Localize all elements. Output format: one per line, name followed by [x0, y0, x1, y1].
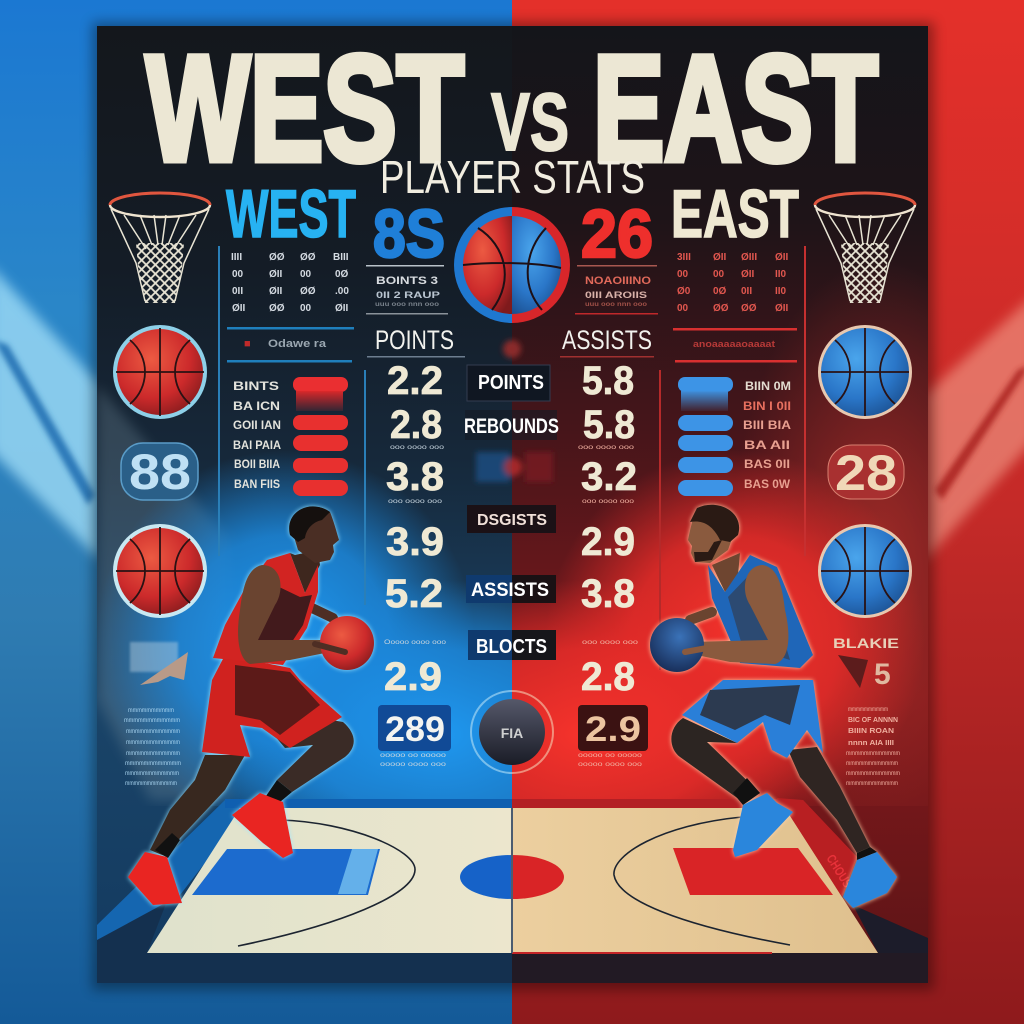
back shoe	[128, 852, 182, 905]
small stat table: east: 0II	[741, 286, 752, 297]
east small graphic	[833, 635, 899, 691]
icon: right hoop	[815, 193, 915, 303]
spotlight beams right	[925, 295, 1024, 560]
east bar list	[678, 377, 791, 496]
centre stat labels: ASSISTS	[471, 580, 549, 601]
east fine print: mmmmmmmmmmmm	[846, 781, 898, 787]
west bar list: BOII BIIA	[234, 457, 280, 471]
small stat table: east: ØIII	[741, 252, 757, 263]
icon: east ball lower	[818, 524, 912, 618]
west caption under score: BOINTS 3	[376, 275, 438, 287]
east team score: 26	[581, 196, 653, 272]
small stat table: west: ØII	[335, 303, 349, 314]
panel shadow	[92, 22, 934, 990]
east caption under score: 0III AROIIS	[585, 290, 647, 300]
west bar list: GOII IAN	[233, 418, 281, 432]
small stat table: east: 0Ø	[713, 286, 727, 297]
ball	[320, 616, 374, 670]
number captions: Ooooo oooo ooo	[384, 640, 447, 646]
west bar list: BINTS	[233, 379, 279, 393]
icon: centre split basketball	[454, 207, 570, 323]
east fine print: BIIIN ROAN	[848, 728, 894, 735]
court	[97, 798, 928, 983]
small stat table: west: 00	[232, 269, 244, 280]
number captions: ooo oooo ooo	[582, 499, 635, 505]
east fine print: BIC OF ANNNN	[848, 717, 898, 724]
jersey	[708, 555, 813, 668]
small stat table: east: ØØ	[741, 303, 757, 314]
title: VS	[491, 77, 569, 168]
west fine print: mmmmmmmmmmmm	[125, 771, 179, 777]
small stat table: west: IIII	[231, 252, 242, 263]
hair	[289, 506, 330, 542]
back leg	[788, 747, 870, 853]
points heading west: POINTS	[375, 325, 454, 355]
socks	[155, 780, 292, 858]
small stat table: west: BIII	[333, 252, 349, 263]
head	[292, 507, 339, 563]
west fine print: mmmmmmmmmmmm	[124, 718, 180, 724]
vertical rule lines	[218, 246, 806, 670]
west caption under score: 0II 2 RAUP	[376, 290, 440, 300]
small stat table: west: ØØ	[300, 286, 316, 297]
east number column: 2.8	[581, 655, 635, 699]
west bar list	[233, 377, 348, 496]
east fine print: nnnn AIA IIII	[848, 740, 894, 747]
main poster panel	[97, 26, 928, 924]
centre stat labels: POINTS	[478, 372, 544, 394]
front leg	[671, 718, 760, 800]
small stat table: west: ØII	[269, 286, 283, 297]
back leg	[150, 755, 245, 857]
east number column: 2.9	[581, 520, 635, 564]
east fine print: mmmmmmmmmmmm	[846, 771, 900, 777]
east number column: 3.8	[581, 572, 635, 616]
socks	[733, 778, 877, 860]
centre stat labels: DSGISTS	[477, 512, 547, 529]
east bar list: BA AII	[744, 438, 790, 452]
centre stat labels: BLOCTS	[476, 636, 547, 658]
east sub header band	[673, 328, 797, 362]
west number column: 2.8	[390, 403, 442, 447]
shorts	[202, 655, 342, 757]
west fine print: mmmmmmmmmmmm	[126, 729, 180, 735]
east boxed total: 2.9	[585, 710, 641, 749]
west player	[128, 506, 374, 905]
ball	[650, 618, 704, 672]
west bar list: BAI PAIA	[233, 438, 281, 452]
east small graphic: 5	[874, 658, 891, 691]
small stat table: east: ØII	[741, 269, 755, 280]
west fine print: mmmmmmmmmmmm	[125, 761, 181, 767]
small stat table: west: 00	[300, 269, 312, 280]
assists heading east: ASSISTS	[562, 325, 652, 355]
icon: west ball lower	[113, 524, 207, 618]
west heading: WEST	[226, 176, 356, 252]
east boxed total	[578, 705, 648, 751]
west key highlight	[338, 849, 378, 894]
small stat table: west: ØØ	[269, 252, 285, 263]
back shoe	[843, 852, 897, 908]
west bar list: BAN FIIS	[234, 477, 280, 491]
west fine print: mmmmmmmmmmmm	[126, 740, 180, 746]
east fine print: mmmmmmmmmm	[848, 707, 888, 713]
east bar list: BIN I 0II	[743, 399, 791, 413]
small stat table: east: 3III	[677, 252, 691, 263]
small stat table: west: ØØ	[269, 303, 285, 314]
background: west blue half	[0, 0, 512, 1024]
small stat table: east: 00	[677, 303, 689, 314]
west bar list: BA ICN	[233, 399, 280, 413]
west number column: 2.9	[384, 655, 442, 699]
east small graphic: BLAKIE	[833, 635, 899, 651]
east number column: 5.8	[583, 403, 635, 447]
west number column: 3.8	[386, 455, 444, 499]
east caption under score: NOAOIIINO	[585, 275, 651, 287]
icon: dark centre ball	[471, 691, 553, 773]
floor lettering: CHOUS	[823, 852, 855, 890]
far arm	[690, 612, 712, 620]
west fine print: mmmmmmmmmm	[128, 708, 174, 714]
east sub header band: anoaaaaaoaaaat	[693, 339, 775, 349]
far arm	[312, 608, 333, 618]
title	[146, 24, 878, 192]
icon: dark centre ball: FIA	[501, 725, 523, 741]
east number column: 3.2	[581, 455, 637, 499]
east score badge: 28	[835, 445, 897, 501]
beard	[694, 540, 722, 562]
small stat table: east: ØØ	[713, 303, 729, 314]
icon: left hoop	[110, 193, 210, 303]
west number column: 3.9	[386, 520, 444, 564]
number captions: ooooo oo ooooo	[380, 753, 447, 759]
west sub header band	[227, 327, 354, 362]
east bar list: BIIN 0M	[745, 379, 791, 393]
west number column	[384, 359, 444, 699]
small stat table: west	[231, 252, 349, 314]
small stat table: west: ØII	[232, 303, 246, 314]
small stat table: east: II0	[775, 286, 787, 297]
west fine print: mmmmmmmmmmmm	[126, 751, 180, 757]
west score badge: 88	[129, 444, 191, 500]
front shoe	[733, 793, 793, 857]
small stat table: west: 00	[300, 303, 312, 314]
number captions: ooo oooo ooo	[582, 640, 639, 646]
west sub header band: ■	[244, 338, 251, 350]
small stat table: east: ØII	[713, 252, 727, 263]
west caption under score: uuu ooo nnn ooo	[375, 302, 439, 308]
front leg	[263, 718, 354, 792]
centre stat labels: REBOUNDS	[464, 415, 559, 438]
small stat table: west: ØØ	[300, 252, 316, 263]
small stat table: west: 0Ø	[335, 269, 349, 280]
east heading: EAST	[671, 176, 799, 252]
near arm	[238, 565, 330, 664]
hand	[685, 648, 707, 652]
west number column: 5.2	[385, 572, 443, 616]
small stat table: east: Ø0	[677, 286, 691, 297]
west sub header band: Odawe ra	[268, 338, 327, 350]
spotlight beams left	[0, 265, 100, 560]
front shoe	[232, 793, 293, 858]
court arcs	[238, 817, 790, 946]
small stat table: east: II0	[775, 269, 787, 280]
small stat table: east: ØII	[775, 252, 789, 263]
neck	[712, 553, 740, 592]
hair	[690, 505, 739, 542]
west team score: 8S	[373, 196, 445, 272]
east caption under score	[575, 265, 658, 314]
title: EAST	[593, 24, 878, 192]
small stat table: east: 00	[677, 269, 689, 280]
small stat table: west: 0II	[232, 286, 243, 297]
icon: east ball upper	[818, 325, 912, 419]
number captions: ooo oooo ooo	[390, 445, 445, 451]
icon: west ball upper	[113, 325, 207, 419]
number captions: ooooo oooo ooo	[578, 762, 643, 768]
number captions	[380, 445, 643, 768]
west boxed total	[378, 705, 451, 751]
west fine print	[124, 708, 181, 787]
west boxed total: 289	[385, 710, 445, 749]
centre logo fragments	[476, 340, 553, 482]
small stat table: east: ØII	[775, 303, 789, 314]
centre circle	[460, 855, 564, 899]
west fine print: mmmmmmmmmmmm	[125, 781, 177, 787]
number captions: ooo oooo ooo	[578, 445, 635, 451]
east player	[650, 505, 897, 908]
east number column	[581, 359, 637, 699]
small stat table: west: ØII	[269, 269, 283, 280]
near arm	[682, 565, 788, 664]
west number column: 2.2	[387, 359, 443, 403]
east caption under score: uuu ooo nnn ooo	[585, 302, 647, 308]
east fine print: mmmmmmmmmmmm	[846, 761, 898, 767]
number captions: ooooo oo ooooo	[578, 753, 643, 759]
background: east red half	[512, 0, 1024, 1024]
number captions: ooo oooo ooo	[388, 499, 443, 505]
subtitle: PLAYER STATS	[380, 151, 645, 203]
small stat table: east	[677, 252, 789, 314]
small stat table: east: 00	[713, 269, 725, 280]
number captions: ooooo oooo ooo	[380, 762, 447, 768]
east bar list: BAS 0W	[744, 477, 791, 491]
title: WEST	[146, 24, 464, 192]
east fine print	[846, 707, 900, 787]
shorts	[682, 680, 823, 758]
east number column: 5.8	[582, 359, 634, 403]
head	[688, 508, 735, 563]
west small graphic	[130, 642, 188, 685]
east key	[673, 848, 833, 895]
west caption under score	[366, 265, 448, 314]
east bar list: BAS 0II	[744, 457, 790, 471]
west key	[192, 849, 380, 895]
jersey	[213, 553, 318, 665]
hand	[315, 644, 345, 652]
centre stat labels	[464, 365, 559, 660]
east bar list: BIII BIA	[743, 418, 791, 432]
small stat table: west: .00	[335, 286, 349, 297]
neck	[290, 550, 320, 593]
east fine print: mmmmmmmmmmmm	[846, 751, 900, 757]
